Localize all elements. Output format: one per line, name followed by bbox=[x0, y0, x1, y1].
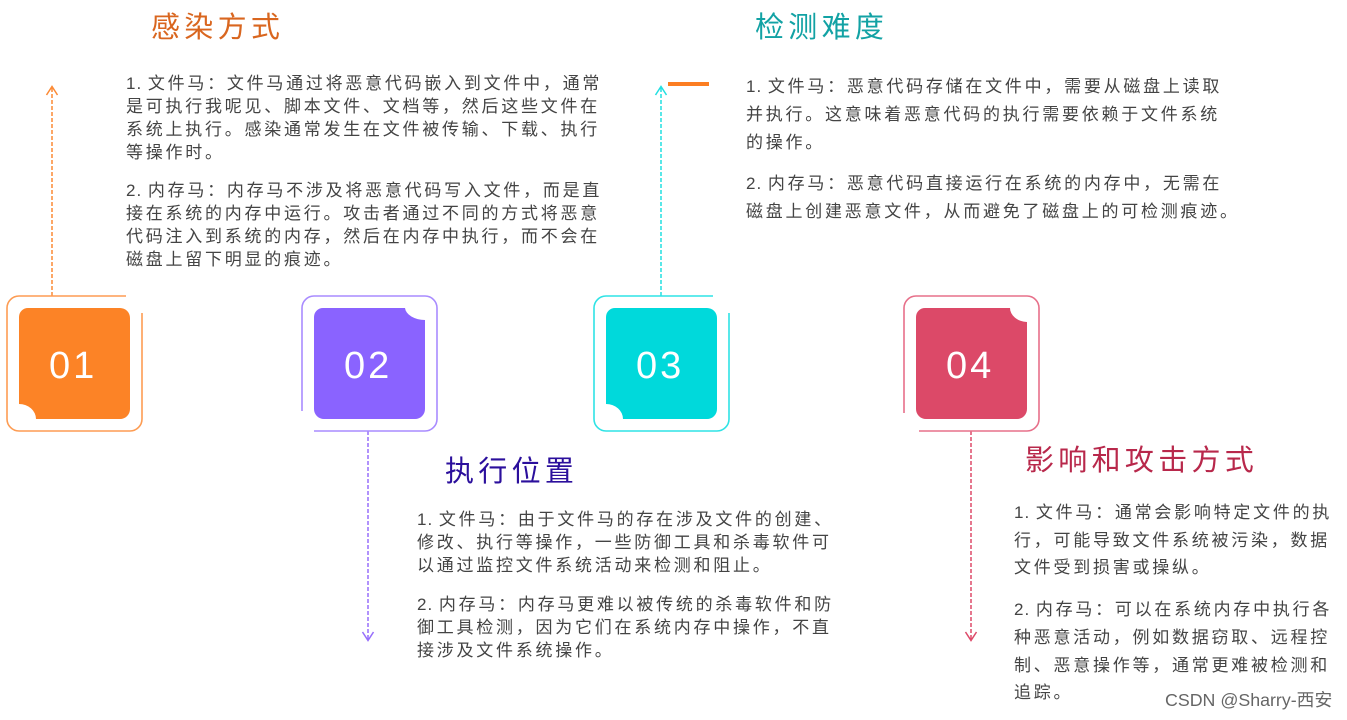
text block: execution location description: 接涉及文件系统操作。 bbox=[417, 641, 614, 660]
text block: impact description: 文件受到损害或操纵。 bbox=[1014, 558, 1212, 577]
panel 02: execution location bbox=[302, 296, 834, 660]
icon: number tile 01: 01 bbox=[49, 345, 97, 387]
arrow: 02 dashed down bbox=[362, 431, 374, 640]
heading: 影响和攻击方式: 影响和攻击方式 bbox=[1025, 444, 1258, 477]
text block: infection method description: 1. 文件马：文件马通过将恶意代码嵌入到文件中，通常 bbox=[126, 74, 602, 93]
icon: number tile 04: 04 bbox=[946, 345, 994, 387]
text block: execution location description: 2. 内存马：内存马更难以被传统的杀毒软件和防 bbox=[417, 595, 834, 614]
text block: infection method description: 是可执行我呢见、脚本文件、文档等，然后这些文件在 bbox=[126, 97, 600, 116]
arrow: 01 dashed up bbox=[46, 86, 58, 296]
text block: impact description: 制、恶意操作等，通常更难被检测和 bbox=[1014, 656, 1330, 675]
text block: execution location description: 1. 文件马：由于文件马的存在涉及文件的创建、 bbox=[417, 510, 834, 529]
text block: infection method description bbox=[126, 74, 602, 269]
icon: number tile 01 bbox=[7, 296, 142, 431]
icon: number tile 02: 02 bbox=[344, 345, 392, 387]
accent bar bbox=[668, 82, 709, 86]
text block: infection method description: 接在系统的内存中运行。攻击者通过不同的方式将恶意 bbox=[126, 204, 600, 223]
arrow: 03 dashed up bbox=[656, 86, 666, 296]
text block: execution location description: 御工具检测，因为它们在系统内存中操作，不直 bbox=[417, 618, 832, 637]
text block: impact description: 行，可能导致文件系统被污染，数据 bbox=[1014, 531, 1330, 550]
text block: detection difficulty description: 2. 内存马：恶意代码直接运行在系统的内存中，无需在 bbox=[746, 174, 1222, 193]
text block: execution location description bbox=[417, 510, 834, 660]
text block: detection difficulty description bbox=[746, 77, 1240, 221]
icon: number tile 03 bbox=[594, 296, 729, 431]
text block: execution location description: 以通过监控文件系统活动来检测和阻止。 bbox=[417, 556, 772, 575]
text block: impact description: 种恶意活动，例如数据窃取、远程控 bbox=[1014, 628, 1330, 647]
text block: detection difficulty description: 的操作。 bbox=[746, 133, 825, 152]
text block: impact description bbox=[1014, 503, 1332, 702]
icon: number tile 04 bbox=[904, 296, 1039, 431]
heading: 检测难度: 检测难度 bbox=[755, 11, 888, 44]
text block: infection method description: 磁盘上留下明显的痕迹。 bbox=[126, 250, 343, 269]
text block: impact description: 2. 内存马：可以在系统内存中执行各 bbox=[1014, 600, 1332, 619]
panel 04: impact and attack method bbox=[904, 296, 1332, 702]
text block: impact description: 1. 文件马：通常会影响特定文件的执 bbox=[1014, 503, 1332, 522]
text block: detection difficulty description: 并执行。这意味着恶意代码的执行需要依赖于文件系统 bbox=[746, 105, 1220, 124]
watermark: CSDN @Sharry-西安 bbox=[1165, 690, 1332, 710]
heading: 执行位置: 执行位置 bbox=[445, 455, 578, 488]
panel 01: infection method bbox=[7, 11, 602, 431]
text block: detection difficulty description: 磁盘上创建恶意文件，从而避免了磁盘上的可检测痕迹。 bbox=[746, 202, 1240, 221]
text block: infection method description: 代码注入到系统的内存，然后在内存中执行，而不会在 bbox=[126, 227, 600, 246]
icon: number tile 02 bbox=[302, 296, 437, 431]
icon: number tile 03: 03 bbox=[636, 345, 684, 387]
text block: detection difficulty description: 1. 文件马：恶意代码存储在文件中，需要从磁盘上读取 bbox=[746, 77, 1222, 96]
text block: impact description: 追踪。 bbox=[1014, 683, 1073, 702]
arrow: 04 dashed down bbox=[966, 431, 976, 640]
text block: execution location description: 修改、执行等操作，一些防御工具和杀毒软件可 bbox=[417, 533, 832, 552]
panel 03: detection difficulty bbox=[594, 11, 1240, 431]
text block: infection method description: 系统上执行。感染通常发生在文件被传输、下载、执行 bbox=[126, 120, 600, 139]
heading: 感染方式: 感染方式 bbox=[151, 11, 284, 44]
text block: infection method description: 2. 内存马：内存马不涉及将恶意代码写入文件，而是直 bbox=[126, 181, 602, 200]
text block: infection method description: 等操作时。 bbox=[126, 143, 225, 162]
